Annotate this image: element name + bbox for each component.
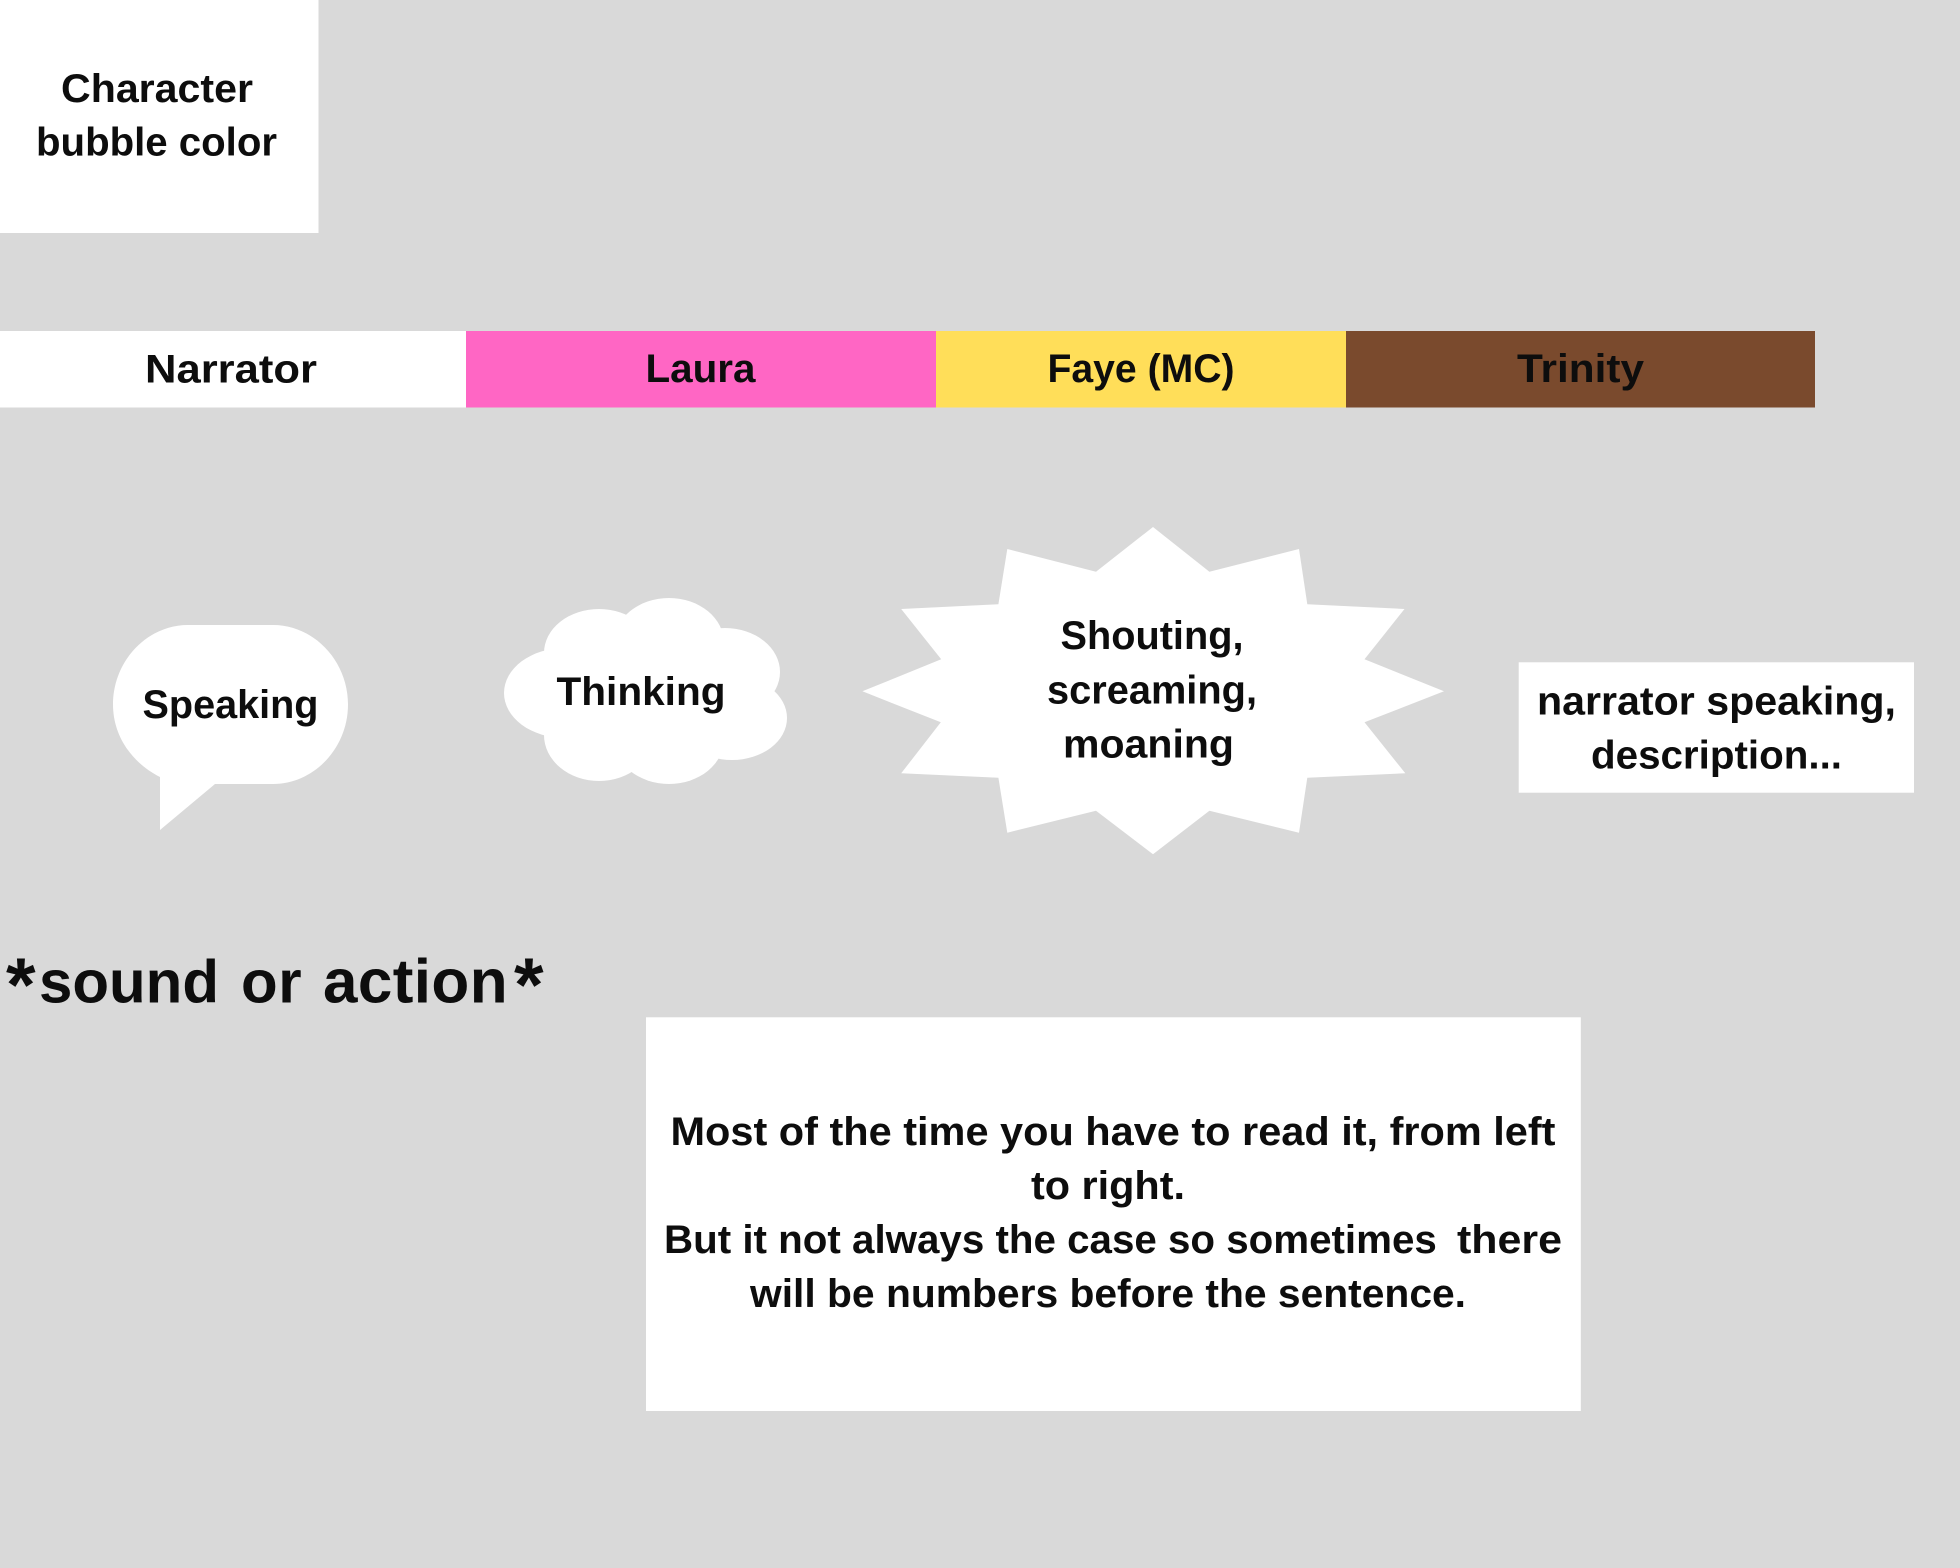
heading: character bubble color: Character <box>61 67 253 111</box>
swatch: Trinity: Trinity <box>1517 347 1645 391</box>
swatch: Faye (MC) <box>936 331 1346 408</box>
panel: reading instructions: But it not always the case so sometimes <box>664 1218 1448 1262</box>
speech bubble: Speaking <box>113 625 348 830</box>
speech bubble: Speaking: Speaking <box>142 683 318 727</box>
heading: character bubble color <box>36 67 277 164</box>
swatch: Trinity <box>1346 331 1815 408</box>
panel: reading instructions <box>646 1017 1581 1411</box>
narration box: narrator speaking, description: description... <box>1591 733 1842 777</box>
narration box: narrator speaking, description <box>1519 662 1914 793</box>
text: sound or action: sound <box>39 948 236 1015</box>
burst bubble: Shouting, screaming, moaning: screaming, <box>1047 668 1257 712</box>
swatch: Narrator <box>0 331 466 408</box>
panel: reading instructions: Most of the time you have to read it, from left <box>670 1110 1556 1154</box>
thought bubble: Thinking: Thinking <box>556 670 726 714</box>
text: sound or action: or <box>241 948 319 1015</box>
panel: title card <box>0 0 318 233</box>
text: sound or action: * <box>514 943 544 1028</box>
heading: character bubble color: bubble color <box>36 120 277 164</box>
panel: reading instructions: to right. <box>1031 1164 1185 1208</box>
narration box: narrator speaking, description: narrator speaking, <box>1537 679 1896 723</box>
panel: reading instructions: there <box>1457 1218 1562 1262</box>
burst bubble: Shouting, screaming, moaning: moaning <box>1063 722 1234 766</box>
panel: reading instructions: will be numbers before the sentence. <box>749 1272 1466 1316</box>
text: sound or action: * <box>6 943 36 1028</box>
swatch: Faye (MC): Faye (MC) <box>1048 347 1234 391</box>
panel: character color bar <box>0 331 1815 408</box>
thought bubble: Thinking <box>504 598 787 784</box>
swatch: Laura <box>466 331 936 408</box>
swatch: Narrator: Narrator <box>145 348 317 392</box>
burst bubble: Shouting, screaming, moaning <box>862 527 1444 854</box>
text: sound or action: action <box>323 947 508 1016</box>
burst bubble: Shouting, screaming, moaning: Shouting, <box>1060 614 1244 658</box>
swatch: Laura: Laura <box>646 347 756 391</box>
